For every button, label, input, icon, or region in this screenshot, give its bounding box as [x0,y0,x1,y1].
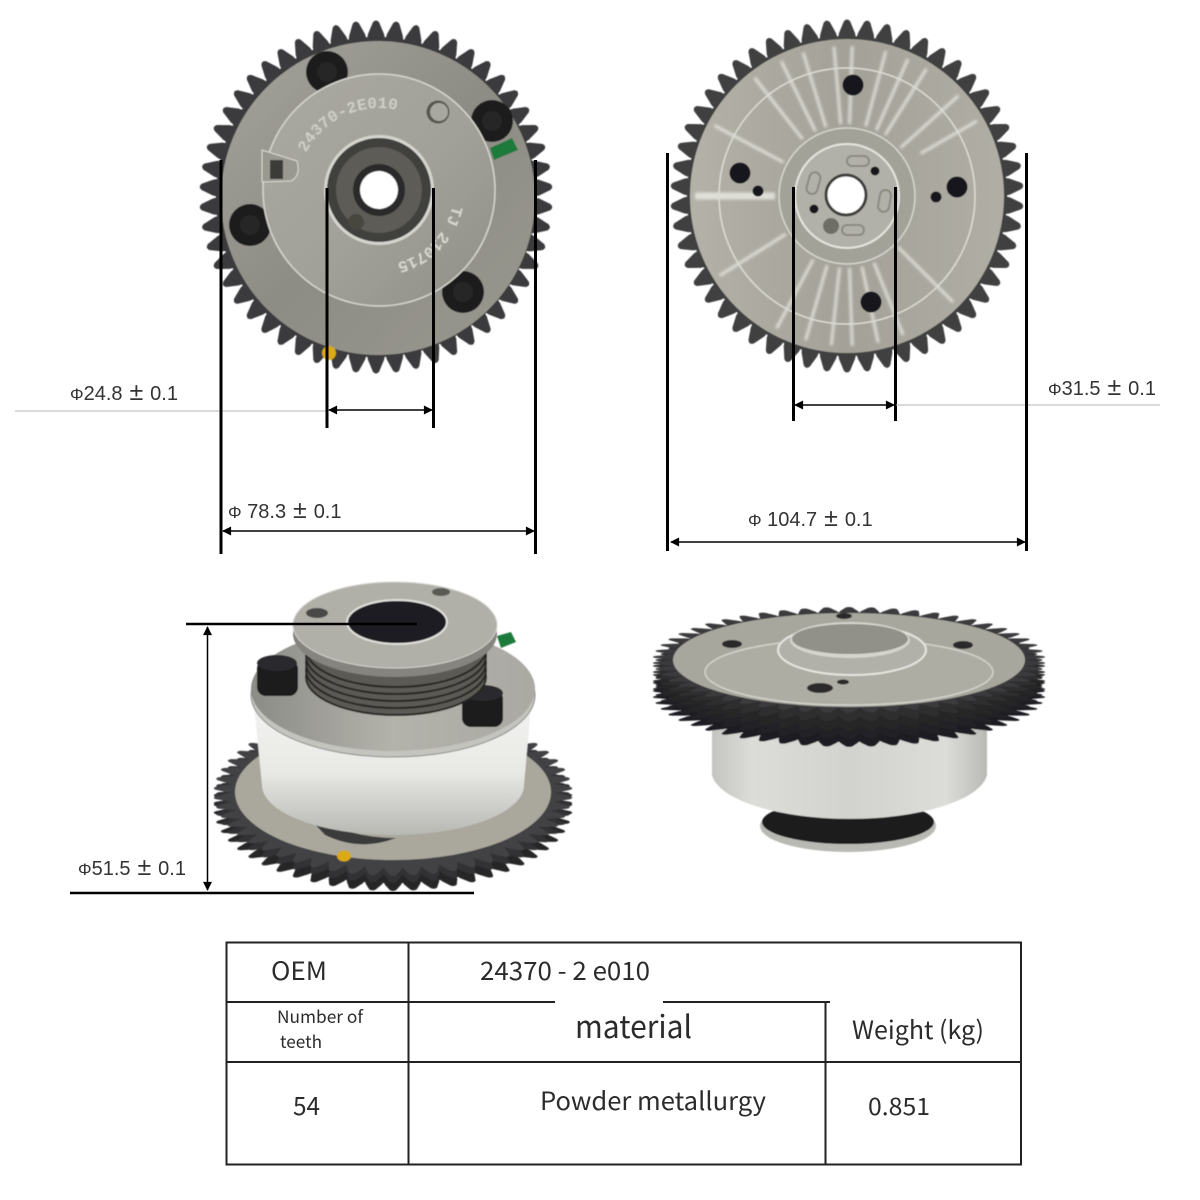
material label: material [575,1002,692,1047]
bolt bottom [442,271,484,313]
sprocket thickness and teeth [620,599,1065,755]
bottom dark ring [760,800,936,852]
weight label: Weight (kg) [852,1011,984,1047]
photo: front view of gear with bolts [199,20,553,374]
sprocket teeth [171,0,570,399]
centre hub [324,135,434,245]
raised hub [778,622,926,675]
teeth label [277,1003,364,1053]
rear face disc [690,39,1004,353]
engraved plate [263,74,495,306]
teeth label: Number of [277,1003,364,1028]
machined ring [719,68,975,324]
plate slot [262,150,298,182]
engraved date code: TJ 210715 [398,208,463,273]
specification table [226,942,1021,1165]
slot pin [270,160,283,179]
radial machining highlights [695,46,977,346]
weight value: 0.851 [868,1087,930,1122]
top rim of body [251,633,535,757]
OEM value: 24370 - 2 e010 [480,952,650,988]
spring coils [306,611,486,715]
bolt right [462,685,503,727]
yellow mark [337,850,351,862]
machined ring [705,639,993,705]
table grid [226,942,1021,1165]
OEM label: OEM [271,952,327,988]
oil slots [805,156,892,235]
green tab [490,138,518,160]
yellow mark [322,346,336,360]
material value: Powder metallurgy [540,1082,766,1118]
bolt right [471,100,513,142]
teeth value: 54 [293,1087,320,1123]
mechanism under cylinder [298,806,396,844]
bolt left [257,655,298,696]
bolt left [229,204,271,246]
photo: angled view of gear with spring [184,582,590,903]
photo: angled view of gear from rear [620,599,1065,852]
gear face disc [221,41,535,355]
grey plug [823,218,839,234]
silver cylinder body [253,695,532,835]
photo: rear view of gear [642,0,1041,398]
gear top face [673,613,1025,707]
teeth label: teeth [280,1028,322,1053]
bolt top [306,51,348,93]
dimension: outer diameter 104.7: Φ 104.7 ± 0.1 [748,504,873,532]
engraved part number: 24370-2E010 [298,97,398,152]
dimension: height 51.5: Φ51.5 ± 0.1 [78,853,186,881]
top plate [293,582,497,677]
sprocket teeth [642,0,1041,398]
bolt holes [722,613,973,693]
bolt holes [730,74,968,312]
dimension: outer diameter 78.3: Φ 78.3 ± 0.1 [228,496,342,524]
silver body [712,715,987,819]
sprocket with teeth [184,698,590,903]
green tab [497,632,516,648]
small plate hole [426,100,450,124]
dimension: inner diameter 24.8: Φ24.8 ± 0.1 [70,378,178,406]
dimension: inner diameter 31.5: Φ31.5 ± 0.1 [1048,373,1156,401]
hub rings [779,128,915,264]
